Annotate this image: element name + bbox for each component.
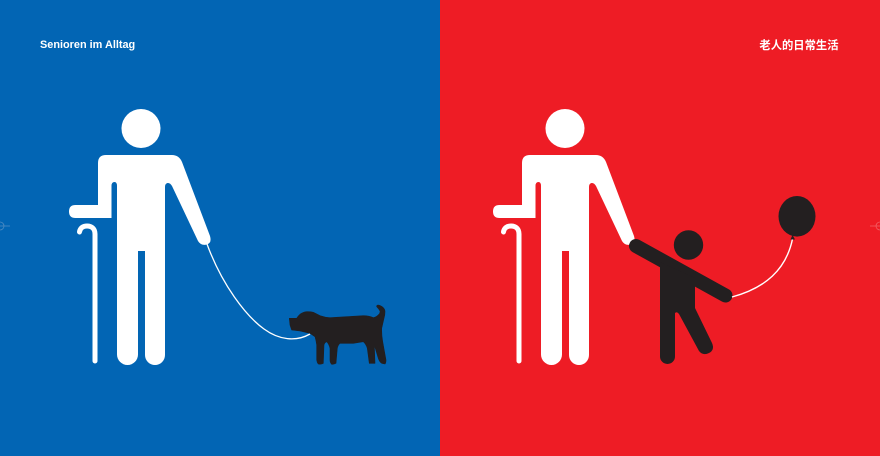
icon: black child holding balloon: [636, 230, 726, 364]
heading: German title: Senioren im Alltag: [40, 39, 135, 51]
icon: black balloon: [778, 196, 816, 240]
panel: blue background: [0, 0, 440, 456]
leash: [207, 244, 310, 339]
icon: senior man with cane, blue panel: [69, 109, 211, 365]
registration mark: left edge: [0, 222, 10, 230]
icon: black dog: [289, 305, 386, 364]
heading: Chinese title: 老人的日常生活: [759, 38, 838, 52]
icon: senior man with cane, red panel: [493, 109, 635, 365]
registration mark: right edge: [870, 222, 880, 230]
panel: red background: [440, 0, 880, 456]
balloon string: [732, 239, 792, 297]
